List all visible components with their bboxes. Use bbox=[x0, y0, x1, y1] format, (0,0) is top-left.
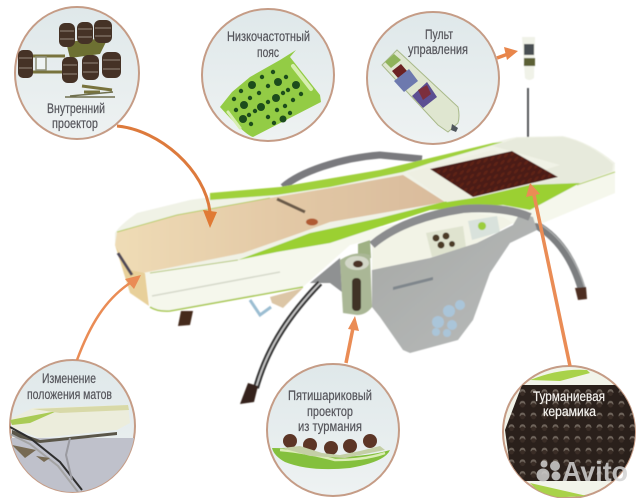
mattress side bbox=[145, 165, 615, 311]
label: low frequency belt: Низкочастотный bbox=[227, 29, 310, 44]
tan mat bbox=[115, 175, 445, 273]
label: inner projector bbox=[47, 101, 105, 131]
arrow: five-ball projector bbox=[346, 316, 359, 363]
brand label bbox=[277, 199, 318, 226]
label: low frequency belt bbox=[227, 29, 310, 60]
mechanism under bed bbox=[250, 300, 271, 315]
photo: ceramic texture bbox=[505, 370, 635, 498]
callout: mat position change bbox=[10, 360, 135, 492]
left arch wedge bbox=[310, 258, 342, 292]
rear leg of front arch bbox=[530, 222, 582, 290]
label: mat position change: положения матов bbox=[27, 387, 112, 402]
front left chrome leg bbox=[256, 283, 320, 388]
label: tourmaline ceramic: керамика bbox=[543, 404, 596, 419]
icon: roller projector bbox=[18, 20, 121, 97]
label: five-ball projector: из турмания bbox=[298, 419, 362, 434]
front green stripe bbox=[238, 183, 580, 260]
control pole bbox=[527, 88, 529, 137]
tourmaline projector cylinder bbox=[358, 240, 371, 258]
massage bed bbox=[115, 37, 615, 404]
callout: five-ball projector bbox=[267, 364, 399, 496]
tourmaline ceramic mat bbox=[430, 151, 558, 197]
icon: green belt bbox=[220, 50, 321, 137]
icon: Avito dots bbox=[536, 460, 560, 482]
label: tourmaline ceramic bbox=[533, 389, 605, 419]
label: remote control bbox=[408, 27, 468, 57]
label: tourmaline ceramic: Турманиевая bbox=[533, 389, 605, 404]
front arch bbox=[372, 208, 530, 245]
label: inner projector: проектор bbox=[52, 116, 98, 131]
callout: remote control bbox=[367, 12, 499, 144]
watermark text: Avito bbox=[562, 456, 628, 487]
white plate bbox=[407, 150, 560, 202]
label: five-ball projector: проектор bbox=[307, 404, 353, 419]
arrow: mat position bbox=[77, 275, 141, 360]
upper green stripe bbox=[210, 142, 503, 200]
control window bbox=[372, 212, 513, 270]
watermark: Avito bbox=[536, 456, 628, 487]
arrow: ceramic callout to mat bbox=[526, 183, 570, 366]
end cap bbox=[115, 245, 149, 306]
label: inner projector: Внутренний bbox=[47, 101, 105, 116]
callout: tourmaline ceramic bbox=[503, 366, 635, 498]
panel logo bbox=[393, 277, 433, 290]
label: five-ball projector bbox=[288, 388, 372, 434]
label: low frequency belt: пояс bbox=[257, 45, 279, 60]
photo: mat side view bbox=[10, 405, 135, 492]
back arm bbox=[283, 155, 422, 187]
label: mat position change bbox=[27, 371, 112, 402]
label: remote control: Пульт bbox=[425, 27, 453, 42]
flower decal bbox=[432, 300, 465, 337]
label: remote control: управления bbox=[408, 42, 468, 57]
callout: low frequency belt bbox=[202, 9, 334, 141]
right foot bbox=[575, 287, 587, 300]
arrow: remote control bbox=[497, 47, 518, 60]
icon: ball projector bbox=[272, 434, 390, 469]
mattress top bbox=[115, 136, 615, 272]
callout: inner projector bbox=[15, 7, 139, 139]
grey front panel bbox=[372, 213, 537, 353]
icon: remote control bbox=[382, 50, 459, 132]
rear foot bbox=[178, 311, 193, 326]
label: mat position change: Изменение bbox=[42, 371, 96, 386]
left foot bbox=[240, 383, 258, 404]
arrow: inner projector to mat bbox=[117, 126, 217, 228]
label: five-ball projector: Пятишариковый bbox=[288, 388, 372, 403]
